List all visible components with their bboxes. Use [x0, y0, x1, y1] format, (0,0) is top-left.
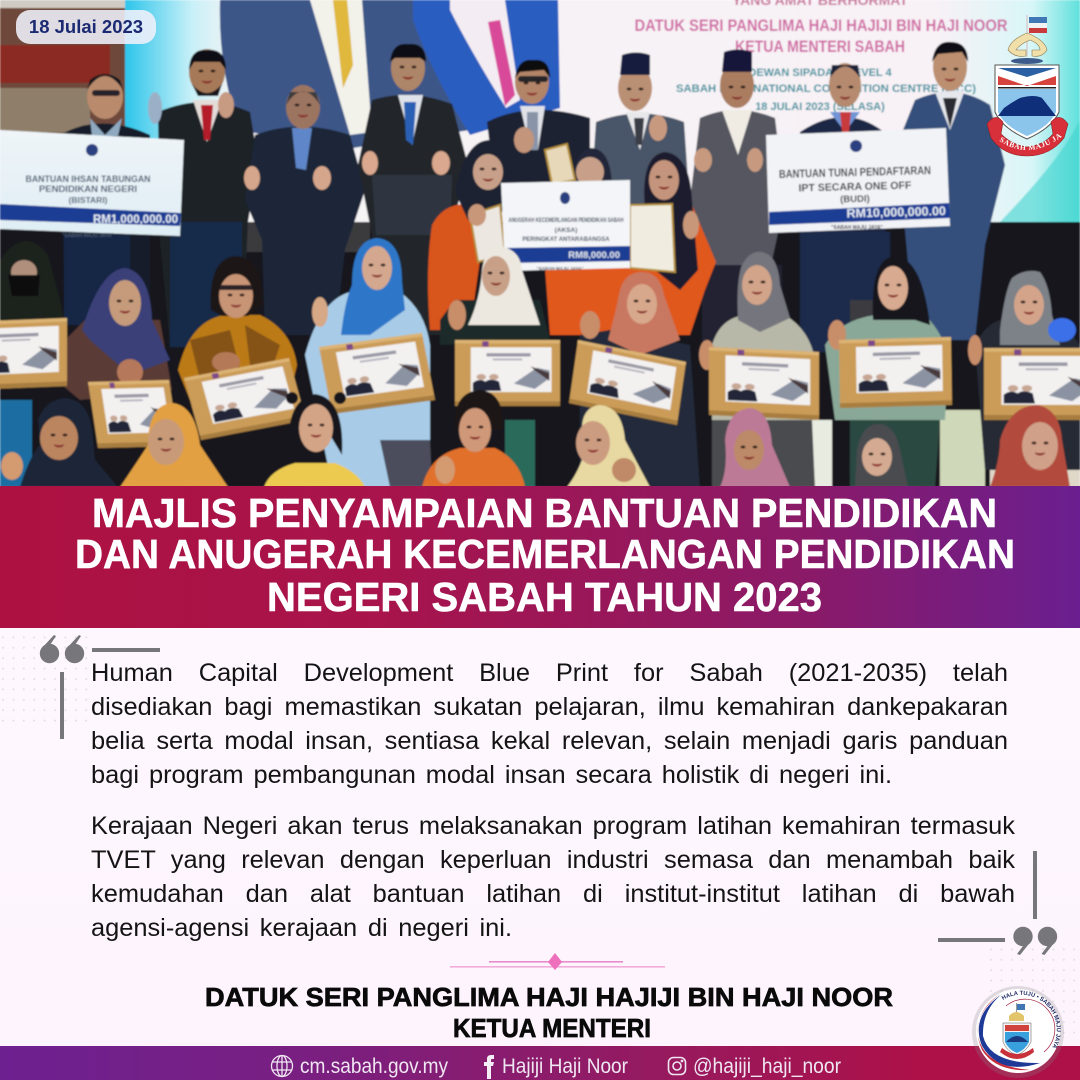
cheque: Bantuan Ihsan Tabungan Pendidikan Negeri: PENDIDIKAN NEGERI	[39, 184, 137, 195]
man 3	[244, 85, 365, 335]
ring text: HALA TUJU • SABAH MAJU JAYA	[1001, 990, 1061, 1048]
icon: globe	[272, 1056, 292, 1076]
stage background	[0, 0, 1080, 487]
body paragraph 2: kemudahan dan alat bantuan latihan di institut-institut latihan di bawah	[91, 880, 1015, 908]
signatory name and role	[205, 982, 894, 1043]
crescent swoosh	[978, 994, 1030, 1070]
man 8	[800, 63, 890, 352]
cheque: Bantuan Ihsan Tabungan Pendidikan Negeri: "SABAH MAJU JAYA"	[62, 233, 115, 239]
navy hijab front	[1, 398, 118, 487]
cheque: Anugerah Kecemerlangan Pendidikan Sabah: (AKSA)	[555, 227, 577, 234]
title banner	[0, 486, 1080, 628]
students in orange jackets	[428, 140, 716, 335]
website: cm.sabah.gov.my	[300, 1055, 448, 1078]
laptop boxes	[0, 318, 1080, 448]
footer bar with social links	[0, 1046, 1080, 1080]
screen portraits	[220, 0, 560, 150]
cream hijab	[567, 405, 650, 487]
yellow blouse girl	[264, 392, 365, 487]
cheque: Bantuan Ihsan Tabungan Pendidikan Negeri: RM1,000,000.00	[93, 214, 178, 226]
batik blouse woman	[178, 256, 297, 400]
round emblem: Hala Tuju Sabah Maju Jaya	[972, 986, 1064, 1078]
logo: Sabah state crest	[986, 15, 1068, 156]
black hijab	[0, 241, 64, 320]
cheque: Bantuan Tunai Pendaftaran IPT: RM10,000,000.00	[846, 204, 946, 221]
body paragraph 1: belia serta modal insan, sentiasa kekal relevan, selain menjadi garis panduan	[91, 727, 1008, 755]
body paragraph 2	[91, 812, 1015, 942]
blue hijab woman	[305, 238, 432, 500]
opening quote mark	[40, 635, 160, 739]
title text: MAJLIS PENYAMPAIAN BANTUAN PENDIDIKAN	[92, 490, 997, 536]
photo: group on stage with cheques and laptop boxes	[0, 0, 1080, 486]
icon: facebook	[484, 1055, 494, 1079]
man 5	[487, 60, 590, 190]
date badge: 18 Julai 2023	[29, 16, 143, 37]
cheque: Bantuan Ihsan Tabungan Pendidikan Negeri	[0, 130, 184, 239]
front row recipients	[1, 390, 1070, 487]
cheque: Anugerah Kecemerlangan Pendidikan Sabah: "SABAH MAJU JAYA"	[537, 266, 583, 271]
cheque: Anugerah Kecemerlangan Pendidikan Sabah: RM8,000.00	[568, 250, 620, 261]
man 2	[148, 49, 258, 347]
title text: NEGERI SABAH TAHUN 2023	[267, 574, 822, 620]
screen text: 18 JULAI 2023 (SELASA)	[755, 101, 885, 113]
signatory name and role: KETUA MENTERI	[453, 1013, 651, 1043]
screen text: DATUK SERI PANGLIMA HAJI HAJIJI BIN HAJI NOOR	[634, 16, 1008, 35]
screen text: DEWAN SIPADAN, LEVEL 4	[748, 67, 892, 79]
cheque: Anugerah Kecemerlangan Pendidikan Sabah: ANUGERAH KECEMERLANGAN PENDIDIKAN SABAH	[508, 217, 624, 224]
mini crest	[1000, 1003, 1034, 1059]
cheque: Bantuan Tunai Pendaftaran IPT: (BUDI)	[840, 194, 870, 205]
back row officials	[60, 42, 1005, 355]
closing quote mark	[938, 851, 1057, 955]
title text	[75, 490, 1015, 620]
body paragraph 1: bagi program pembangunan modal insan secara holistik di negeri ini.	[91, 761, 892, 789]
gray hijab right woman	[968, 271, 1080, 470]
body paragraph 2: Kerajaan Negeri akan terus melaksanakan program latihan kemahiran termasuk	[91, 812, 1015, 840]
ribbon	[986, 117, 1068, 156]
cheque: Anugerah Kecemerlangan Pendidikan Sabah	[501, 180, 630, 271]
cheque: Anugerah Kecemerlangan Pendidikan Sabah: PERINGKAT ANTARABANGSA	[522, 237, 610, 243]
white hijab woman	[440, 246, 550, 345]
man 9	[903, 42, 1005, 340]
gray hijab woman	[699, 252, 815, 487]
facial features	[51, 66, 1048, 466]
orange dress woman	[422, 390, 525, 487]
icon: instagram	[668, 1058, 686, 1074]
arms holding dagger	[1008, 33, 1047, 56]
cheque: Bantuan Tunai Pendaftaran IPT	[766, 128, 950, 233]
screen text	[634, 0, 1008, 113]
instagram handle: @hajiji_haji_noor	[693, 1055, 841, 1078]
signatory name and role: DATUK SERI PANGLIMA HAJI HAJIJI BIN HAJI NOOR	[205, 982, 893, 1012]
man 4	[358, 44, 468, 335]
screen text: KETUA MENTERI SABAH	[735, 37, 905, 56]
orange hijab	[120, 403, 228, 487]
dark hair woman	[825, 256, 948, 487]
cheque: Bantuan Tunai Pendaftaran IPT: BANTUAN TUNAI PENDAFTARAN	[779, 165, 931, 181]
shield	[995, 65, 1059, 139]
ornament divider	[450, 953, 665, 970]
seated row of recipients	[0, 238, 1080, 500]
cheque: Bantuan Ihsan Tabungan Pendidikan Negeri: (BISTARI)	[68, 195, 108, 205]
pink hijab front	[720, 408, 790, 487]
navy hijab	[60, 268, 172, 400]
facebook name: Hajiji Haji Noor	[502, 1055, 628, 1078]
screen text: SABAH INTERNATIONAL CONVENTION CENTRE (SICC)	[676, 83, 976, 95]
body paragraph 2: agensi-agensi kerajaan di negeri ini.	[91, 914, 512, 942]
gray hijab front	[855, 424, 908, 487]
flag	[1026, 15, 1047, 57]
cheque: Bantuan Ihsan Tabungan Pendidikan Negeri: BANTUAN IHSAN TABUNGAN	[26, 174, 151, 185]
crest wreath	[1011, 58, 1043, 64]
body paragraph 2: TVET yang relevan dengan keperluan industri semasa dan menambah baik	[91, 846, 1015, 874]
body paragraph 1: Human Capital Development Blue Print for Sabah (2021-2035) telah	[91, 659, 1008, 687]
man 7	[690, 50, 785, 355]
dot pattern decoration and quote marks	[2, 635, 1076, 1034]
red hijab	[990, 405, 1070, 487]
cheque: Bantuan Tunai Pendaftaran IPT: IPT SECARA ONE OFF	[798, 180, 912, 194]
title text: DAN ANUGERAH KECEMERLANGAN PENDIDIKAN	[75, 531, 1015, 577]
body paragraph 1: disediakan bagi memastikan sukatan pelajaran, ilmu kemahiran dankepakaran	[91, 693, 1008, 721]
man 6	[590, 52, 690, 210]
cheque: Bantuan Tunai Pendaftaran IPT: "SABAH MAJU JAYA"	[831, 225, 884, 231]
date badge	[16, 10, 156, 44]
pink hijab woman	[580, 272, 700, 490]
body paragraph 1	[91, 659, 1008, 789]
man 1	[60, 74, 150, 325]
